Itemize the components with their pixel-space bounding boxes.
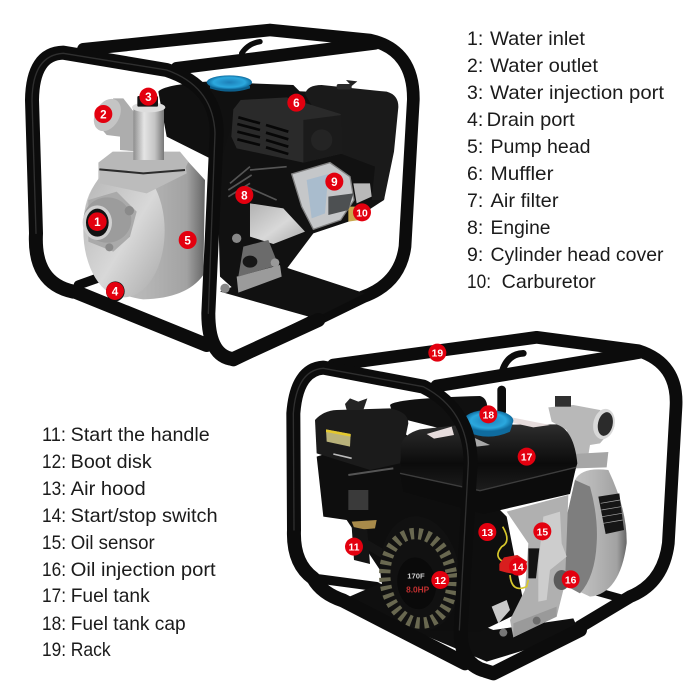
pump body — [83, 160, 205, 299]
rack: near loop — [293, 368, 580, 673]
callout 5 — [179, 231, 197, 249]
legend: parts 1 to 10: Drain port — [487, 109, 575, 131]
air filter — [305, 80, 398, 200]
fuel tank cap — [463, 410, 513, 437]
callout 11: 11 — [349, 543, 360, 554]
legend: parts 1 to 10: 7: — [467, 190, 483, 212]
legend: parts 11 to 19: 19: — [42, 639, 66, 661]
legend: parts 11 to 19: 18: — [42, 613, 66, 635]
callout 15: 15 — [537, 527, 548, 538]
legend: parts 1 to 10: 4: — [467, 109, 483, 131]
callout 8: 8 — [241, 189, 248, 202]
callout 10: 10 — [356, 208, 368, 219]
fuel cap — [207, 75, 252, 92]
cylinder head cover — [292, 163, 354, 229]
water inlet — [83, 192, 137, 252]
legend: parts 1 to 10: Muffler — [490, 163, 554, 185]
legend: parts 11 to 19: 15: — [42, 532, 66, 554]
engine backdrop — [317, 430, 525, 632]
boot disk: 8.0HP — [406, 584, 430, 594]
legend: parts 1 to 10: 3: — [467, 82, 483, 104]
callout 3: 3 — [145, 91, 152, 104]
water injection tube — [132, 96, 165, 160]
callout 9 — [325, 173, 343, 191]
legend: parts 1 to 10: 2: — [467, 55, 483, 77]
illustration: water pump rear view — [293, 337, 676, 673]
callout 19 — [428, 344, 446, 362]
callout 4: 4 — [112, 285, 119, 298]
rack: far loop and rails — [78, 30, 413, 360]
legend: parts 11 to 19: 13: — [42, 478, 66, 500]
legend: parts 11 to 19: 17: — [42, 585, 66, 607]
callout 13: 13 — [482, 528, 493, 539]
callout 6: 6 — [293, 97, 300, 110]
water outlet — [548, 396, 618, 455]
base plate — [342, 583, 580, 662]
boot disk: 170F — [407, 571, 425, 580]
callout 13 — [478, 523, 496, 541]
callout 18 — [479, 405, 497, 423]
wires — [498, 527, 528, 588]
fuel tank — [400, 417, 577, 514]
callout 8 — [235, 186, 253, 204]
callout 12 — [431, 571, 449, 589]
fuel tank rear — [158, 82, 307, 163]
callout 2: 2 — [100, 108, 107, 121]
legend: parts 11 to 19: Oil sensor — [71, 532, 155, 554]
callout 15 — [533, 522, 551, 540]
pump flange — [573, 452, 608, 468]
legend: parts 11 to 19: 12: — [42, 451, 66, 473]
callout 14 — [509, 558, 527, 576]
legend: parts 1 to 10: Engine — [490, 217, 550, 239]
rear tank — [390, 396, 487, 430]
bracket — [528, 548, 539, 578]
muffler cover — [231, 97, 343, 163]
start/stop switch — [499, 555, 527, 575]
pump top flange — [98, 152, 188, 174]
callout 16 — [562, 570, 580, 588]
legend: parts 11 to 19: 16: — [42, 559, 66, 581]
legend: parts 11 to 19: Start/stop switch — [71, 505, 218, 527]
water outlet elbow — [88, 94, 142, 152]
air filter — [315, 398, 408, 530]
legend: parts 1 to 10: Water inlet — [490, 28, 586, 50]
legend: parts 1 to 10: 10: — [467, 271, 491, 293]
callout 19: 19 — [432, 349, 443, 360]
callout 5: 5 — [184, 234, 191, 247]
callout 17 — [518, 448, 536, 466]
legend: parts 11 to 19: Fuel tank — [71, 585, 150, 607]
callout 10 — [353, 203, 371, 221]
legend: parts 11 to 19: Fuel tank cap — [71, 613, 186, 635]
legend: parts 11 to 19: Rack — [71, 639, 111, 661]
callout 11 — [345, 538, 363, 556]
illustration: water pump front view — [32, 30, 413, 360]
legend: parts 1 to 10: 1: — [467, 28, 483, 50]
drain plug — [106, 281, 125, 301]
callout 3 — [139, 88, 157, 106]
legend: parts 1 to 10: 5: — [467, 136, 483, 158]
legend: parts 1 to 10: Cylinder head cover — [490, 244, 664, 266]
legend: parts 1 to 10: Water outlet — [490, 55, 599, 77]
crankcase — [499, 495, 568, 637]
callout 14: 14 — [512, 563, 524, 574]
engine backdrop — [207, 87, 397, 292]
legend: parts 1 to 10: 8: — [467, 217, 483, 239]
callout 16: 16 — [565, 575, 577, 586]
callout 12: 12 — [435, 576, 446, 587]
callout 6 — [287, 94, 305, 112]
callout 4 — [106, 282, 124, 300]
boot disk — [373, 511, 467, 636]
legend: parts 1 to 10: 9: — [467, 244, 483, 266]
callout 18: 18 — [483, 410, 494, 421]
engine block — [220, 167, 372, 293]
callout 1: 1 — [94, 216, 101, 229]
rack: far loop and rails — [315, 337, 676, 627]
legend: parts 11 to 19: Air hood — [71, 478, 146, 500]
legend: parts 1 to 10: 6: — [467, 163, 483, 185]
callout 9: 9 — [331, 176, 338, 189]
base plate — [220, 267, 365, 318]
legend: parts 1 to 10 — [467, 28, 665, 293]
callout 1 — [88, 212, 107, 231]
legend: parts 1 to 10: Pump head — [490, 136, 590, 158]
legend: parts 11 to 19 — [42, 424, 218, 661]
legend: parts 11 to 19: 11: — [42, 424, 66, 446]
sticker on housing — [492, 600, 510, 623]
rack: near loop — [32, 53, 318, 359]
legend: parts 11 to 19: Start the handle — [71, 424, 210, 446]
legend: parts 11 to 19: 14: — [42, 505, 66, 527]
start handle — [352, 527, 387, 564]
legend: parts 11 to 19: Oil injection port — [71, 559, 216, 581]
pump head — [562, 469, 627, 597]
callout 2 — [94, 105, 112, 123]
legend: parts 1 to 10: Carburetor — [502, 271, 596, 293]
oil port — [554, 570, 570, 590]
legend: parts 1 to 10: Air filter — [490, 190, 559, 212]
callout 17: 17 — [521, 453, 533, 464]
legend: parts 1 to 10: Water injection port — [490, 82, 665, 104]
legend: parts 11 to 19: Boot disk — [71, 451, 152, 473]
